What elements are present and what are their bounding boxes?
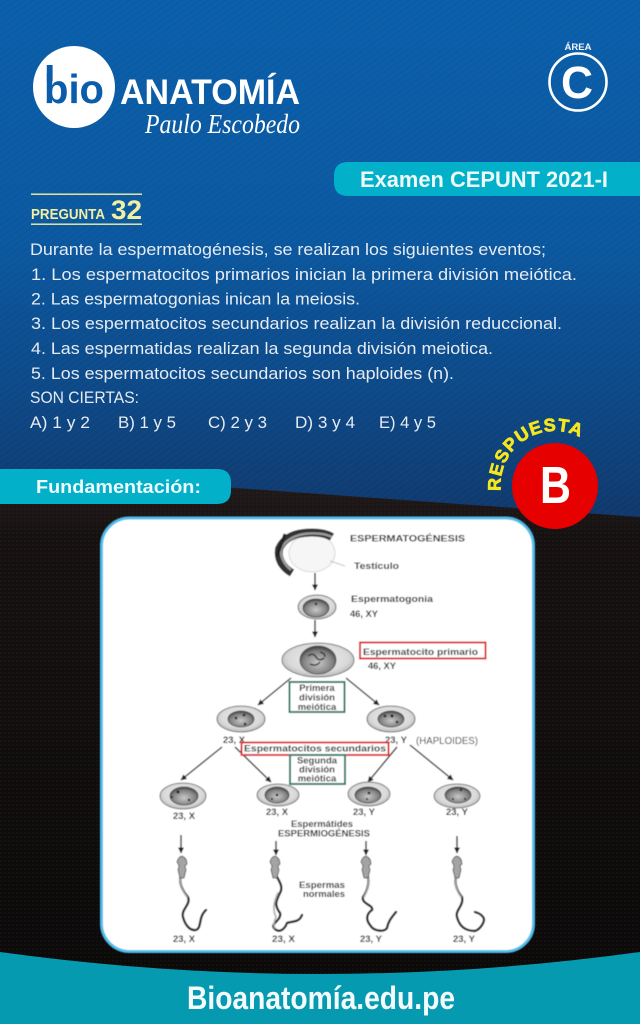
callout: Primera división meiótica: Primera <box>299 683 335 694</box>
footer website text: Bioanatomía.edu.pe <box>187 980 455 1016</box>
icon: sperm 2 <box>270 856 302 931</box>
cell: secondary spermatocyte right <box>367 706 415 732</box>
label: 46, XY primary: 46, XY <box>368 661 396 671</box>
question text: E) 4 y 5 <box>379 413 436 432</box>
label: 23, X: 23, X <box>223 735 245 745</box>
question text: 4. Las espermatidas realizan la segunda división meiotica. <box>31 339 493 358</box>
callout: Primera división meiótica: división <box>299 692 335 704</box>
question text: 3. Los espermatocitos secundarios realizan la división reduccional. <box>31 314 562 333</box>
cell: spermatogonium <box>298 595 336 619</box>
logo: Bioanatomía Paulo Escobedo: Paulo Escobedo <box>144 109 300 139</box>
labels: spermatid chromosomes: 23, X <box>266 807 288 817</box>
section tab: Fundamentación: Fundamentación: <box>36 477 201 497</box>
labels: spermatid chromosomes: 23, Y <box>446 807 468 817</box>
question text: D) 3 y 4 <box>295 413 355 432</box>
cell: secondary spermatocyte left <box>217 706 265 732</box>
question text: SON CIERTAS: <box>30 388 139 407</box>
background: dark lower section <box>0 471 640 1024</box>
question number heading <box>31 194 142 225</box>
footer band <box>0 952 640 1024</box>
question text: C) 2 y 3 <box>208 413 267 432</box>
logo: Bioanatomía Paulo Escobedo <box>33 46 300 139</box>
labels: spermatid chromosomes: 23, X <box>173 811 195 821</box>
labels: sperm chromosomes: 23, Y <box>453 934 475 944</box>
callout: Primera división meiótica <box>290 682 344 713</box>
cell: primary spermatocyte <box>282 643 354 677</box>
background: blue upper section <box>0 0 640 530</box>
label: HAPLOIDES: (HAPLOIDES) <box>416 736 478 747</box>
diagram title: ESPERMATOGÉNESIS <box>350 534 465 544</box>
badge: area C <box>550 42 606 110</box>
callout: Espermatocito primario: Espermatocito primario <box>363 647 479 657</box>
labels: sperm chromosomes: 23, X <box>173 934 195 944</box>
callout: Primera división meiótica: meiótica <box>298 702 337 713</box>
labels: sperm chromosomes: 23, Y <box>360 934 382 944</box>
logo: Bioanatomía Paulo Escobedo: ANATOMÍA <box>120 72 300 112</box>
callout: Segunda división meiótica: meiótica <box>298 774 337 784</box>
label: Espermas normales: normales <box>303 889 345 899</box>
arrow: testicle to spermatogonium <box>314 573 316 590</box>
icon: testicle <box>277 532 345 573</box>
cell: spermatid 4 <box>434 784 480 808</box>
arrow: primary to left secondary <box>258 678 291 705</box>
labels: sperm chromosomes <box>173 934 475 944</box>
callout: Segunda división meiótica: división <box>299 764 335 776</box>
question text: 2. Las espermatogonias inican la meiosis. <box>31 290 360 308</box>
arrows: secondary to spermatids <box>181 745 453 782</box>
answer badge: RESPUESTA <box>488 418 580 490</box>
labels: spermatid chromosomes <box>173 807 468 821</box>
arrows: spermatids to sperm <box>181 835 457 855</box>
question text <box>30 240 577 432</box>
logo: Bioanatomía Paulo Escobedo: bio <box>44 66 104 112</box>
badge: area C: C <box>561 57 593 108</box>
icon: sperm 1 <box>177 856 206 930</box>
question text: 5. Los espermatocitos secundarios son haploides (n). <box>31 364 454 383</box>
diagram panel <box>102 518 534 952</box>
cell: spermatid 2 <box>257 784 299 806</box>
label: Espermas normales <box>299 880 345 899</box>
label: Espermatogonia: Espermatogonia <box>351 594 434 604</box>
question text: 1. Los espermatocitos primarios inician la primera división meiótica. <box>31 265 577 284</box>
badge: area C: ÁREA <box>565 42 592 53</box>
question text: A) 1 y 2 <box>30 413 90 432</box>
label: Espermátides: Espermátides <box>291 819 353 829</box>
label: Testículo: Testículo <box>354 561 400 571</box>
label: ESPERMIOGÉNESIS: ESPERMIOGÉNESIS <box>278 828 370 838</box>
callout: Espermatocito primario <box>360 642 486 658</box>
question text: B) 1 y 5 <box>118 413 176 432</box>
question number heading: 32 <box>111 195 142 225</box>
question number heading: PREGUNTA <box>31 206 105 223</box>
section tab: Fundamentación <box>0 469 231 504</box>
icon: sperm 3 <box>361 856 396 931</box>
arrow: spermatogonium to primary spermatocyte <box>314 620 316 637</box>
callout: Espermatocitos secundarios <box>242 742 388 755</box>
labels: spermatid chromosomes: 23, Y <box>353 807 375 817</box>
label: Espermas normales: Espermas <box>299 880 345 890</box>
answer badge: B <box>540 457 571 515</box>
cell: spermatid 1 <box>160 783 206 809</box>
labels: sperm chromosomes: 23, X <box>272 934 295 944</box>
label: 46, XY: 46, XY <box>350 609 378 619</box>
question text: Durante la espermatogénesis, se realizan los siguientes eventos; <box>30 240 546 259</box>
exam banner: Examen CEPUNT 2021-I <box>360 167 608 192</box>
icon: sperm 4 <box>452 856 484 931</box>
callout: Segunda división meiótica <box>290 755 345 784</box>
cell: spermatid 3 <box>348 782 390 806</box>
callout: Segunda división meiótica: Segunda <box>297 756 338 766</box>
label: 23, Y: 23, Y <box>385 735 407 745</box>
callout: Espermatocitos secundarios: Espermatocitos secundarios <box>244 744 386 754</box>
exam banner <box>334 162 640 196</box>
answer badge <box>488 418 598 529</box>
arrow: primary to right secondary <box>346 678 379 705</box>
